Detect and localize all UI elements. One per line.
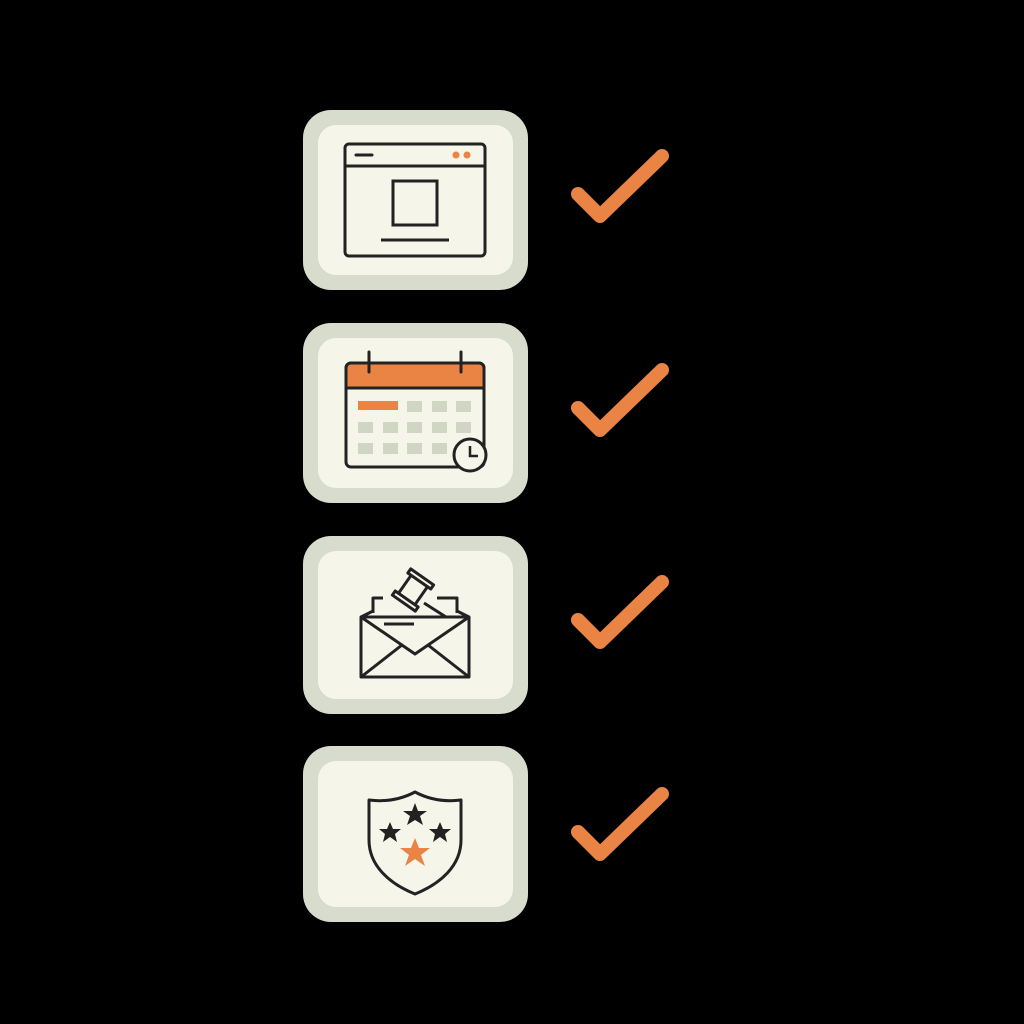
icon: browser window: [345, 144, 485, 256]
icon: checkmark 1: [578, 156, 662, 216]
panel: shield card: [303, 746, 528, 922]
panel: envelope card: [303, 536, 528, 714]
icon: envelope with gavel: [361, 569, 469, 677]
panel: browser card: [303, 110, 528, 290]
icon: calendar: [346, 352, 486, 471]
panel: calendar card: [303, 323, 528, 503]
icon: checkmark 4: [578, 794, 662, 854]
icon: checkmark 2: [578, 370, 662, 430]
icon: shield with stars: [369, 792, 461, 894]
icon: checkmark 3: [578, 582, 662, 642]
